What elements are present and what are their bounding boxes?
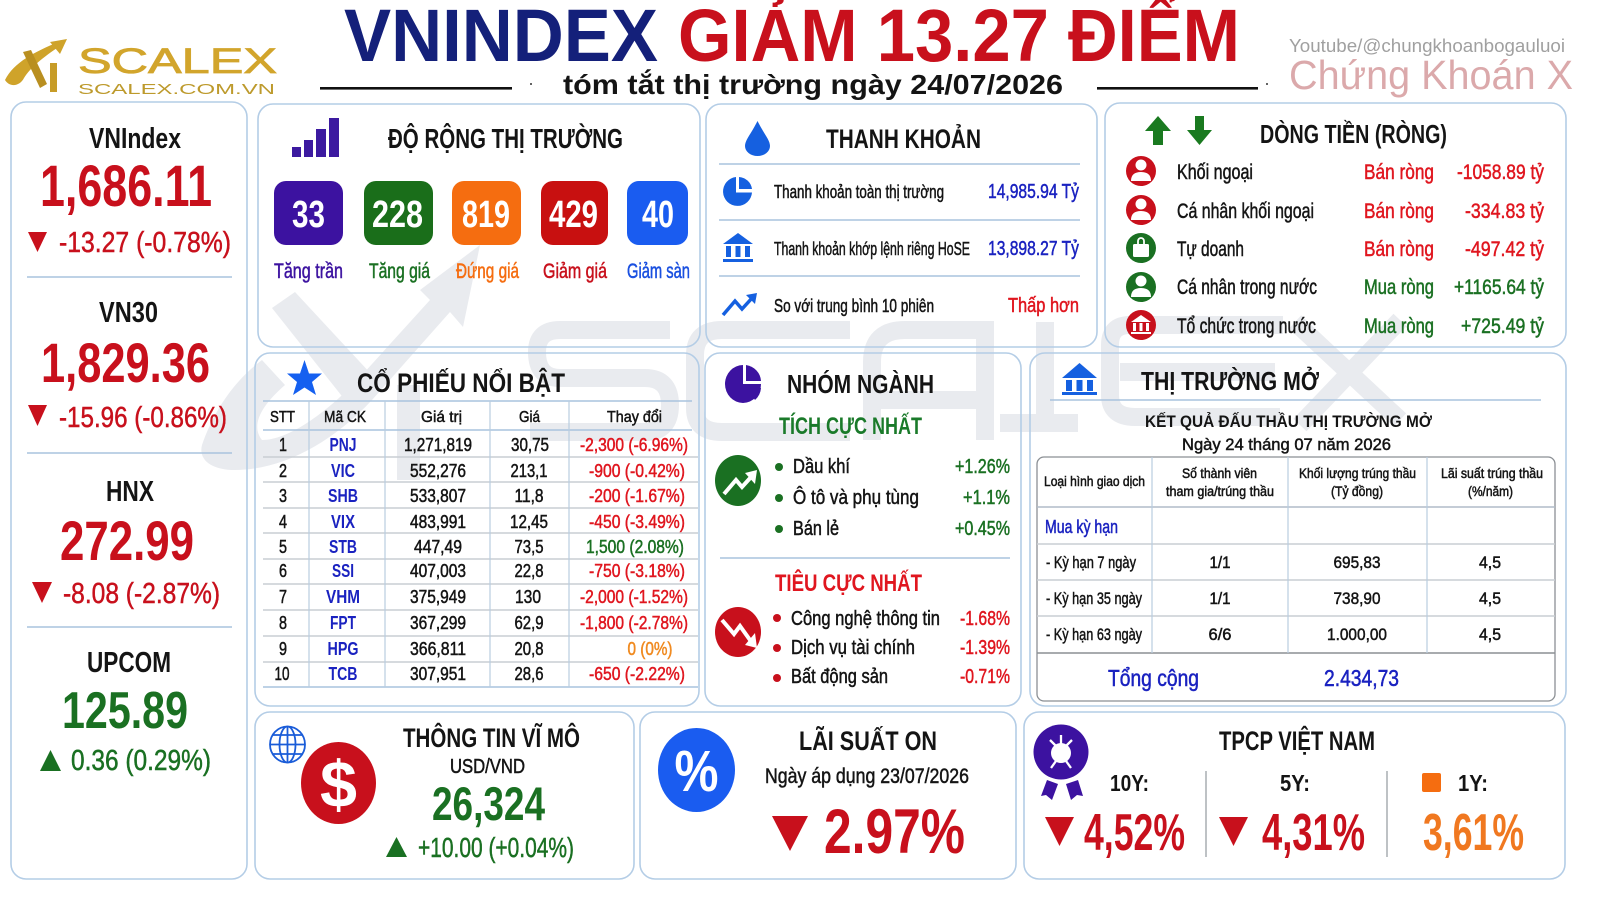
bond: 5Y: 5Y: bbox=[1280, 770, 1310, 796]
row: VIX: VIX bbox=[331, 512, 355, 532]
row: STB bbox=[279, 537, 684, 557]
row: 7-day term: 695,83 bbox=[1334, 553, 1380, 572]
heading: liquidity: THANH KHOẢN bbox=[826, 122, 981, 154]
bond: 1Y bbox=[1422, 770, 1524, 862]
row: VIX: 4 bbox=[279, 512, 287, 532]
index: HNX: 272.99 bbox=[60, 509, 194, 572]
channel credit: Youtube/@chungkhoanbogauluoi bbox=[1289, 36, 1565, 56]
heading: open market: THỊ TRƯỜNG MỞ bbox=[1141, 365, 1320, 396]
stat: unchanged: Đứng giá bbox=[456, 260, 519, 283]
row: STB: 73,5 bbox=[514, 537, 544, 557]
panel: top stocks bbox=[255, 353, 699, 706]
row: TCB: TCB bbox=[328, 664, 358, 684]
channel credit: Chứng Khoán X bbox=[1289, 52, 1573, 98]
heading: breadth: ĐỘ RỘNG THỊ TRƯỜNG bbox=[388, 122, 623, 154]
row: 35-day term: 738,90 bbox=[1334, 589, 1380, 608]
row: VIX: 12,45 bbox=[510, 512, 548, 532]
icon: trend up bbox=[723, 293, 757, 315]
row: VHM: 375,949 bbox=[410, 587, 466, 607]
panel: overnight rate bbox=[640, 712, 1016, 879]
row: FPT: 62,9 bbox=[514, 613, 544, 633]
panel: net cash flow bbox=[1105, 103, 1566, 347]
panel: sectors bbox=[705, 353, 1021, 706]
row: proprietary: Tự doanh bbox=[1177, 238, 1244, 261]
row: TCB: 10 bbox=[274, 664, 290, 684]
row: SSI: 22,8 bbox=[514, 561, 544, 581]
icon: up and down arrows bbox=[1145, 116, 1212, 145]
row: foreign individuals: Bán ròng bbox=[1364, 200, 1434, 223]
label: USD/VND: USD/VND bbox=[450, 756, 525, 778]
index: HNX: -8.08 (-2.87%) bbox=[63, 578, 220, 610]
row: proprietary: Bán ròng bbox=[1364, 238, 1434, 261]
stat: unchanged bbox=[452, 181, 521, 283]
row: total liquidity: Thanh khoản toàn thị trường bbox=[774, 182, 944, 202]
row: VHM: 7 bbox=[279, 587, 287, 607]
row: 63-day term: 6/6 bbox=[1208, 625, 1232, 644]
row: 7-day term: - Kỳ hạn 7 ngày bbox=[1046, 553, 1136, 572]
row: domestic institutions: Mua ròng bbox=[1364, 315, 1434, 338]
row: foreign institutions: Bán ròng bbox=[1364, 161, 1434, 184]
row: order-matched liquidity: 13,898.27 Tỷ bbox=[988, 238, 1079, 260]
subheading: auction results bbox=[1145, 412, 1432, 454]
row: domestic institutions bbox=[1126, 310, 1544, 340]
index: UPCOM: UPCOM bbox=[87, 647, 171, 679]
logo: SCALEX: SCALEX.COM.VN bbox=[78, 81, 275, 98]
row: SHB bbox=[279, 486, 685, 506]
row: SHB: SHB bbox=[328, 486, 358, 506]
heading: government bonds: TPCP VIỆT NAM bbox=[1219, 725, 1375, 756]
row: 7-day term: 4,5 bbox=[1479, 553, 1501, 572]
list: negative sectors: -1.68% bbox=[960, 608, 1010, 630]
row: 63-day term bbox=[1046, 625, 1501, 644]
row: total liquidity bbox=[774, 181, 1079, 203]
row: 35-day term: 1/1 bbox=[1210, 589, 1230, 608]
list: positive sectors: +1.26% bbox=[955, 456, 1010, 478]
index: HNX bbox=[32, 476, 220, 610]
subheading: auction results: KẾT QUẢ ĐẤU THẦU THỊ TRƯỜNG MỞ bbox=[1145, 412, 1432, 431]
icon: bar signal bbox=[292, 118, 339, 157]
row: domestic individuals: +1165.64 tỷ bbox=[1454, 276, 1544, 299]
table header: Giá trị bbox=[421, 409, 462, 426]
list: positive sectors: Ô tô và phụ tùng bbox=[793, 486, 919, 509]
row: PNJ: PNJ bbox=[330, 435, 356, 455]
row: STB: 1,500 (2.08%) bbox=[586, 537, 684, 557]
stat: limit down: 40 bbox=[642, 194, 674, 236]
row: VIX: -450 (-3.49%) bbox=[589, 512, 685, 532]
list: negative sectors: -0.71% bbox=[960, 666, 1010, 688]
stat: limit down: Giảm sàn bbox=[627, 260, 690, 283]
row: PNJ: -2,300 (-6.96%) bbox=[580, 435, 688, 455]
row: FPT bbox=[279, 613, 688, 633]
bond: 10Y: 4,52% bbox=[1084, 804, 1185, 862]
row: 63-day term: 4,5 bbox=[1479, 625, 1501, 644]
row: 35-day term bbox=[1046, 589, 1501, 608]
change: exchange rate: +10.00 (+0.04%) bbox=[418, 832, 574, 863]
stat: limit up: Tăng trần bbox=[274, 260, 343, 283]
bond: 10Y bbox=[1045, 770, 1185, 862]
icon: percent bbox=[658, 728, 735, 812]
list: negative sectors: Công nghệ thông tin bbox=[791, 608, 940, 630]
stat: limit up bbox=[274, 181, 343, 283]
row: VIC bbox=[279, 461, 685, 481]
row: 7-day term bbox=[1046, 553, 1501, 572]
value: overnight rate: 2.97% bbox=[824, 797, 965, 867]
bond: 10Y: 10Y: bbox=[1110, 770, 1149, 796]
icon: purple pie bbox=[725, 365, 761, 403]
table header: Mã CK bbox=[324, 409, 366, 426]
title bbox=[344, 0, 1240, 77]
index: HNX: HNX bbox=[106, 476, 155, 508]
row: proprietary bbox=[1126, 233, 1544, 263]
icon: bank bbox=[723, 233, 753, 262]
row: domestic individuals: Mua ròng bbox=[1364, 276, 1434, 299]
bond: 5Y bbox=[1219, 770, 1365, 862]
table: auction results bbox=[1037, 457, 1555, 701]
index: VN30 bbox=[28, 297, 227, 434]
table header: (%/năm) bbox=[1468, 484, 1513, 499]
row: versus 10-session average: Thấp hơn bbox=[1008, 295, 1079, 317]
stat: declining: Giảm giá bbox=[543, 260, 607, 283]
icon: water drop bbox=[745, 121, 770, 156]
heading: sectors: NHÓM NGÀNH bbox=[787, 369, 934, 399]
change: exchange rate bbox=[386, 832, 574, 863]
icon: dollar coin: $ bbox=[320, 747, 357, 821]
row: STB: STB bbox=[329, 537, 357, 557]
row: SHB: -200 (-1.67%) bbox=[589, 486, 685, 506]
row: STB: 5 bbox=[279, 537, 287, 557]
row: SHB: 3 bbox=[279, 486, 287, 506]
list: positive sectors: +1.1% bbox=[963, 487, 1010, 509]
row: 63-day term: 1.000,00 bbox=[1327, 625, 1387, 644]
row: HPG: HPG bbox=[328, 639, 358, 659]
table header: Giá bbox=[519, 409, 540, 426]
row: VHM: -2,000 (-1.52%) bbox=[580, 587, 688, 607]
row: VIX: 483,991 bbox=[410, 512, 466, 532]
row: SSI: 407,003 bbox=[410, 561, 466, 581]
row: FPT: FPT bbox=[330, 613, 356, 633]
row: TCB: -650 (-2.22%) bbox=[589, 664, 685, 684]
icon: dollar coin bbox=[301, 742, 376, 824]
row: domestic individuals: Cá nhân trong nước bbox=[1177, 276, 1317, 299]
label: effective date: Ngày áp dụng 23/07/2026 bbox=[765, 765, 969, 788]
table header bbox=[1044, 466, 1543, 499]
index: UPCOM: 0.36 (0.29%) bbox=[71, 745, 211, 777]
stat: limit up: 33 bbox=[292, 194, 325, 236]
panel: open market bbox=[1030, 353, 1566, 706]
panel: macro bbox=[255, 712, 634, 879]
index: UPCOM: 125.89 bbox=[62, 682, 188, 740]
row: domestic institutions: Tổ chức trong nước bbox=[1177, 315, 1316, 338]
row: foreign institutions: -1058.89 tỷ bbox=[1457, 161, 1544, 184]
index: VN30: 1,829.36 bbox=[41, 331, 210, 394]
icon: green trend up bbox=[715, 455, 761, 506]
table header: (Tỷ đồng) bbox=[1331, 484, 1383, 499]
row: VIX bbox=[279, 512, 685, 532]
index: VN30: VN30 bbox=[99, 297, 158, 329]
panel: liquidity bbox=[706, 104, 1097, 347]
table header: Thay đổi bbox=[607, 408, 662, 426]
row: versus 10-session average: So với trung bình 10 phiên bbox=[774, 296, 934, 316]
icon: blue bank bbox=[1062, 363, 1097, 395]
table header: Số thành viên bbox=[1182, 466, 1257, 481]
heading: macro: THÔNG TIN VĨ MÔ bbox=[403, 722, 580, 753]
icon: star bbox=[287, 360, 322, 395]
list: positive sectors: Bán lẻ bbox=[793, 518, 839, 540]
row: 35-day term: 4,5 bbox=[1479, 589, 1501, 608]
row: SHB: 533,807 bbox=[410, 486, 466, 506]
row: PNJ: 1,271,819 bbox=[404, 435, 472, 455]
subheading: auction results: Ngày 24 tháng 07 năm 2026 bbox=[1182, 435, 1391, 454]
row: PNJ bbox=[279, 435, 688, 455]
list: positive sectors: Dầu khí bbox=[793, 456, 850, 478]
index: VNIndex: 1,686.11 bbox=[40, 154, 212, 219]
table header: tham gia/trúng thầu bbox=[1166, 484, 1274, 499]
row: PNJ: 1 bbox=[279, 435, 287, 455]
row: foreign individuals bbox=[1126, 195, 1544, 225]
heading: net cash flow: DÒNG TIỀN (RÒNG) bbox=[1260, 119, 1447, 149]
row: TCB bbox=[274, 664, 685, 684]
table header: Khối lượng trúng thầu bbox=[1299, 466, 1416, 481]
bond: 1Y: 1Y: bbox=[1458, 770, 1488, 796]
row: VHM bbox=[279, 587, 688, 607]
row: total: Tổng cộng bbox=[1108, 665, 1199, 691]
table header bbox=[270, 408, 662, 426]
value: overnight rate bbox=[772, 797, 965, 867]
row: domestic individuals bbox=[1126, 272, 1544, 302]
row: VHM: 130 bbox=[515, 587, 541, 607]
row: SHB: 11,8 bbox=[514, 486, 544, 506]
panel: government bonds bbox=[1024, 712, 1565, 879]
logo: SCALEX: SCALEX bbox=[78, 42, 277, 81]
row: VIC: 2 bbox=[279, 461, 287, 481]
row: PNJ: 30,75 bbox=[511, 435, 549, 455]
row: VIC: 552,276 bbox=[410, 461, 466, 481]
row: total bbox=[1108, 665, 1399, 691]
row: VIC: 213,1 bbox=[510, 461, 548, 481]
list: negative sectors: Dịch vụ tài chính bbox=[791, 637, 915, 659]
heading: overnight rate: LÃI SUẤT ON bbox=[799, 725, 937, 756]
index: VN30: -15.96 (-0.86%) bbox=[59, 402, 227, 434]
row: SSI bbox=[279, 561, 685, 581]
row: HPG: 9 bbox=[279, 639, 287, 659]
logo: SCALEX bbox=[5, 39, 277, 98]
row: SSI: 6 bbox=[279, 561, 287, 581]
row: STB: 447,49 bbox=[414, 537, 462, 557]
icon: pie bbox=[723, 177, 752, 206]
subtitle: tóm tắt thị trường ngày 24/07/2026 bbox=[563, 69, 1063, 100]
panel: market indices bbox=[11, 102, 247, 879]
row: FPT: 367,299 bbox=[410, 613, 466, 633]
list: negative sectors bbox=[773, 608, 1010, 688]
icon: globe bbox=[270, 726, 305, 762]
row: VHM: VHM bbox=[326, 587, 360, 607]
index: UPCOM bbox=[40, 647, 211, 777]
stat: declining bbox=[541, 181, 608, 283]
stat: advancing: Tăng giá bbox=[369, 260, 430, 283]
stat: advancing: 228 bbox=[372, 194, 423, 236]
row: VIC: VIC bbox=[331, 461, 355, 481]
index: VNIndex: -13.27 (-0.78%) bbox=[59, 227, 231, 259]
watermark bbox=[201, 245, 1400, 480]
row: HPG: 366,811 bbox=[410, 639, 466, 659]
row: 35-day term: - Kỳ hạn 35 ngày bbox=[1046, 589, 1142, 608]
list: positive sectors bbox=[775, 456, 1010, 540]
row: domestic institutions: +725.49 tỷ bbox=[1461, 315, 1544, 338]
row: proprietary: -497.42 tỷ bbox=[1465, 238, 1544, 261]
table: top stocks bbox=[263, 401, 698, 687]
row: 63-day term: - Kỳ hạn 63 ngày bbox=[1046, 625, 1142, 644]
row: FPT: -1,800 (-2.78%) bbox=[580, 613, 688, 633]
row: HPG bbox=[279, 639, 672, 659]
row: term purchase: Mua kỳ hạn bbox=[1045, 517, 1118, 537]
stat: declining: 429 bbox=[549, 194, 598, 236]
row: order-matched liquidity: Thanh khoản khớp lệnh riêng HoSE bbox=[774, 239, 970, 259]
row: 7-day term: 1/1 bbox=[1210, 553, 1230, 572]
row: foreign institutions bbox=[1126, 156, 1544, 186]
heading: most negative: TIÊU CỰC NHẤT bbox=[775, 569, 922, 597]
row: versus 10-session average bbox=[774, 295, 1079, 317]
stat: limit down bbox=[627, 181, 690, 283]
row: HPG: 20,8 bbox=[514, 639, 544, 659]
panel: market breadth bbox=[258, 104, 700, 347]
list: negative sectors: Bất động sản bbox=[791, 666, 888, 688]
row: SSI: SSI bbox=[332, 561, 354, 581]
row: SSI: -750 (-3.18%) bbox=[589, 561, 685, 581]
row: VIC: -900 (-0.42%) bbox=[589, 461, 685, 481]
row: total liquidity: 14,985.94 Tỷ bbox=[988, 181, 1079, 203]
table header: STT bbox=[270, 409, 295, 426]
row: total: 2.434,73 bbox=[1324, 665, 1399, 691]
heading: most positive: TÍCH CỰC NHẤT bbox=[779, 412, 922, 440]
bond: 5Y: 4,31% bbox=[1262, 804, 1365, 862]
value: exchange rate: 26,324 bbox=[432, 777, 545, 830]
list: positive sectors: +0.45% bbox=[955, 518, 1010, 540]
table header: Lãi suất trúng thầu bbox=[1441, 466, 1543, 481]
row: foreign institutions: Khối ngoại bbox=[1177, 161, 1253, 184]
bond: 1Y: 3,61% bbox=[1423, 804, 1524, 862]
row: foreign individuals: Cá nhân khối ngoại bbox=[1177, 200, 1314, 223]
row: FPT: 8 bbox=[279, 613, 287, 633]
list: negative sectors: -1.39% bbox=[960, 637, 1010, 659]
row: TCB: 307,951 bbox=[410, 664, 466, 684]
icon: percent: % bbox=[674, 739, 718, 804]
stat: unchanged: 819 bbox=[462, 194, 510, 236]
row: HPG: 0 (0%) bbox=[628, 639, 672, 659]
stat: advancing bbox=[364, 181, 433, 283]
row: TCB: 28,6 bbox=[514, 664, 544, 684]
index: VNIndex: VNIndex bbox=[89, 123, 181, 155]
icon: medal bbox=[1034, 724, 1088, 800]
table header: Loại hình giao dịch bbox=[1044, 474, 1145, 489]
icon: red trend down bbox=[715, 607, 761, 657]
index: VNIndex bbox=[28, 123, 231, 259]
row: foreign individuals: -334.83 tỷ bbox=[1465, 200, 1544, 223]
heading: top stocks: CỔ PHIẾU NỔI BẬT bbox=[357, 367, 565, 398]
